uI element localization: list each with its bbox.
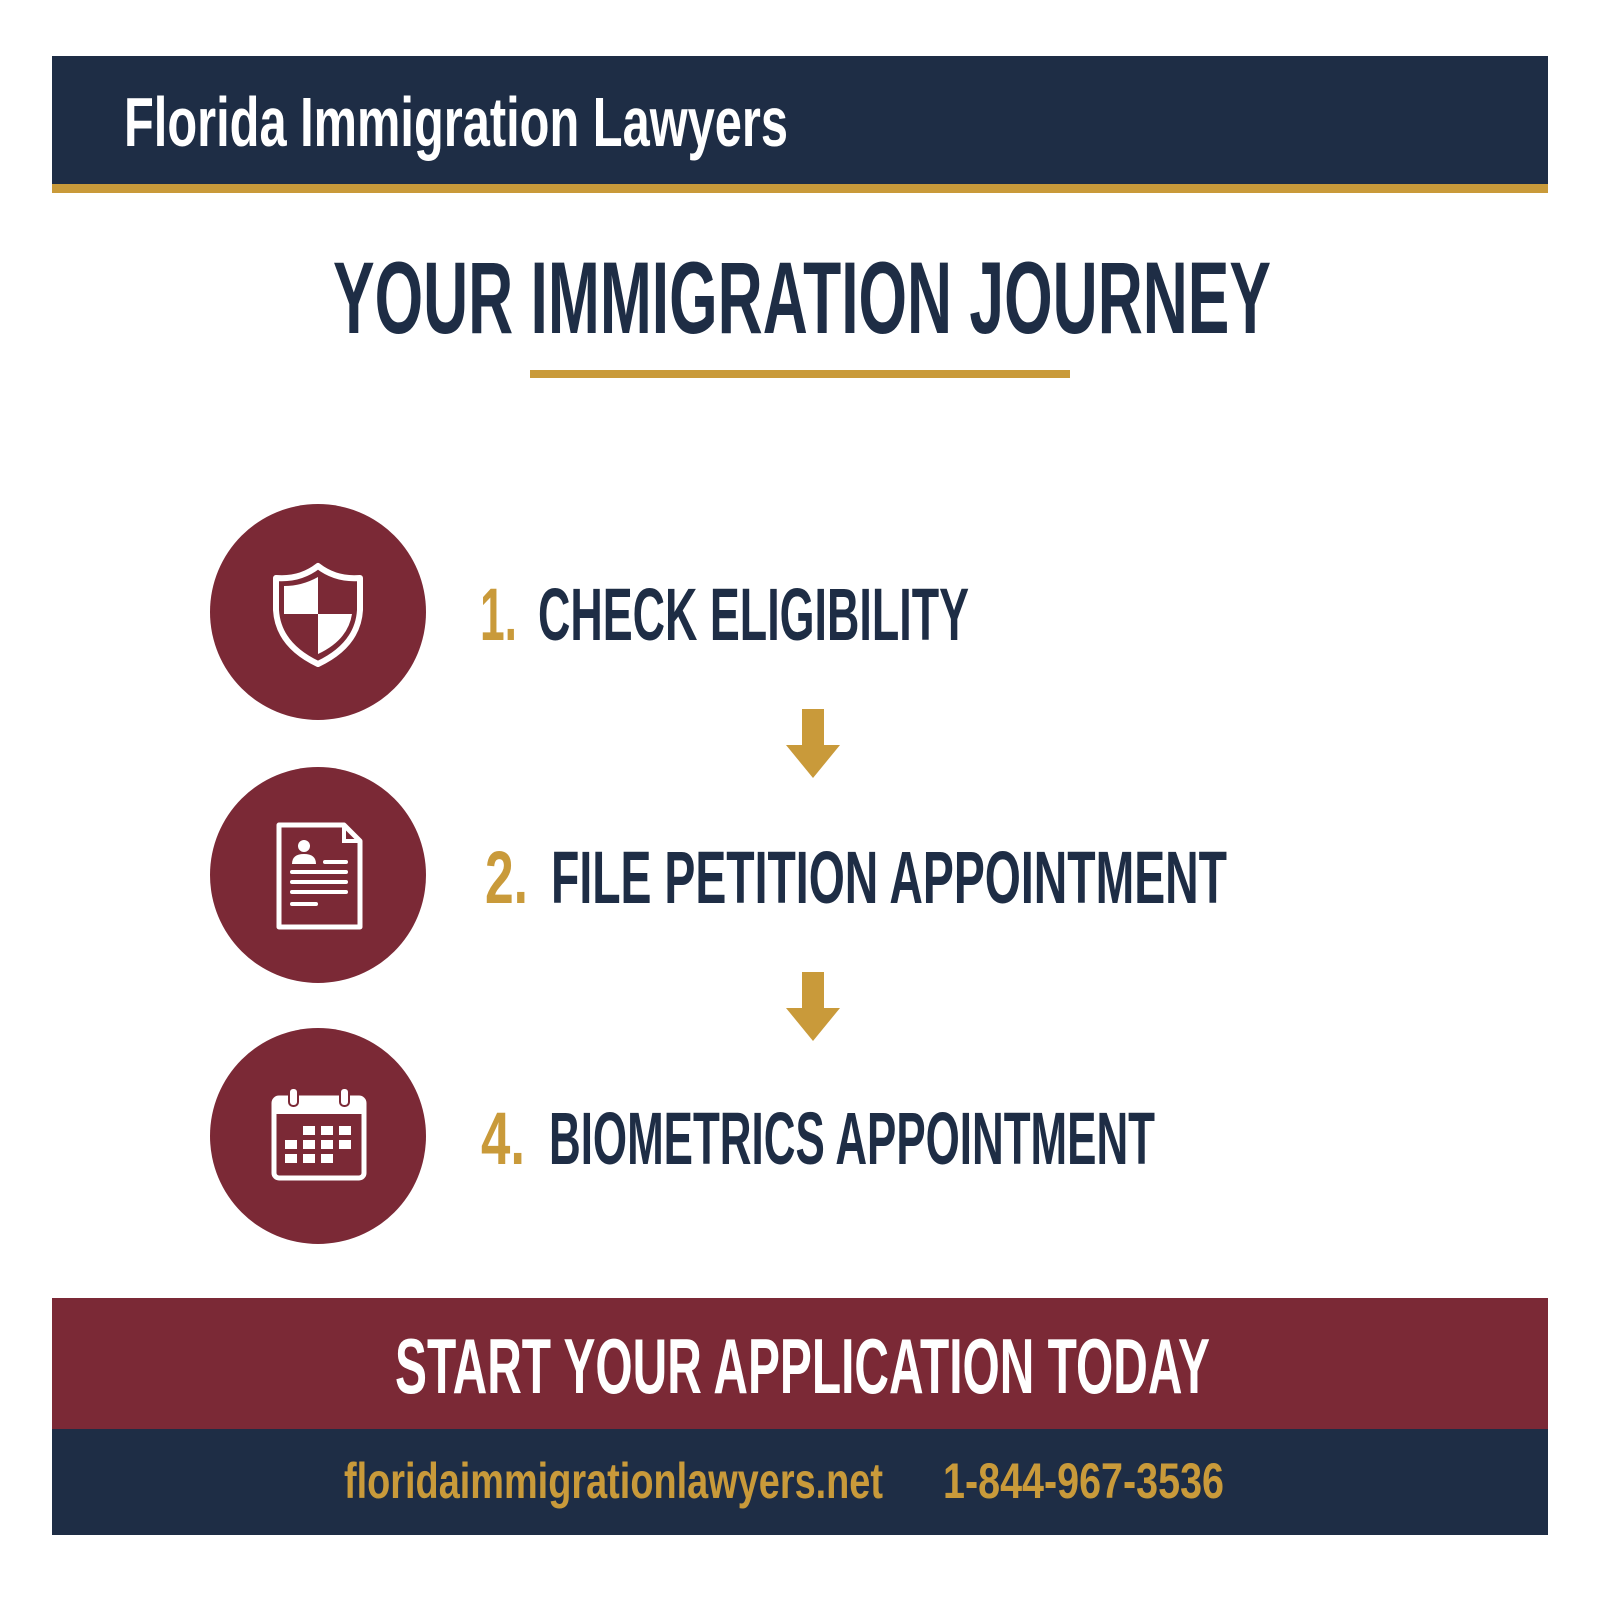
step 1 [210, 504, 969, 720]
step 2 [210, 767, 1227, 983]
arrow 2 [786, 972, 840, 1041]
step 3 [210, 1028, 1155, 1244]
icon: calendar [210, 1028, 426, 1244]
contact footer: floridaimmigrationlawyers.net [344, 1453, 883, 1509]
icon: document [210, 767, 426, 983]
header bar [52, 56, 1548, 193]
call to action banner [52, 1298, 1548, 1430]
step 3 label: 4. [481, 1097, 525, 1180]
arrow 1 [786, 709, 840, 778]
step 2: FILE PETITION APPOINTMENT [551, 836, 1227, 919]
header title: Florida Immigration Lawyers [124, 83, 788, 161]
step 3: BIOMETRICS APPOINTMENT [549, 1097, 1155, 1180]
title underline [530, 370, 1070, 378]
icon: shield [210, 504, 426, 720]
contact footer [52, 1429, 1548, 1535]
contact footer: 1-844-967-3536 [943, 1453, 1224, 1509]
step 1 label: 1. [480, 573, 517, 656]
step 2 label: 2. [485, 836, 528, 919]
step 1: CHECK ELIGIBILITY [538, 573, 969, 656]
